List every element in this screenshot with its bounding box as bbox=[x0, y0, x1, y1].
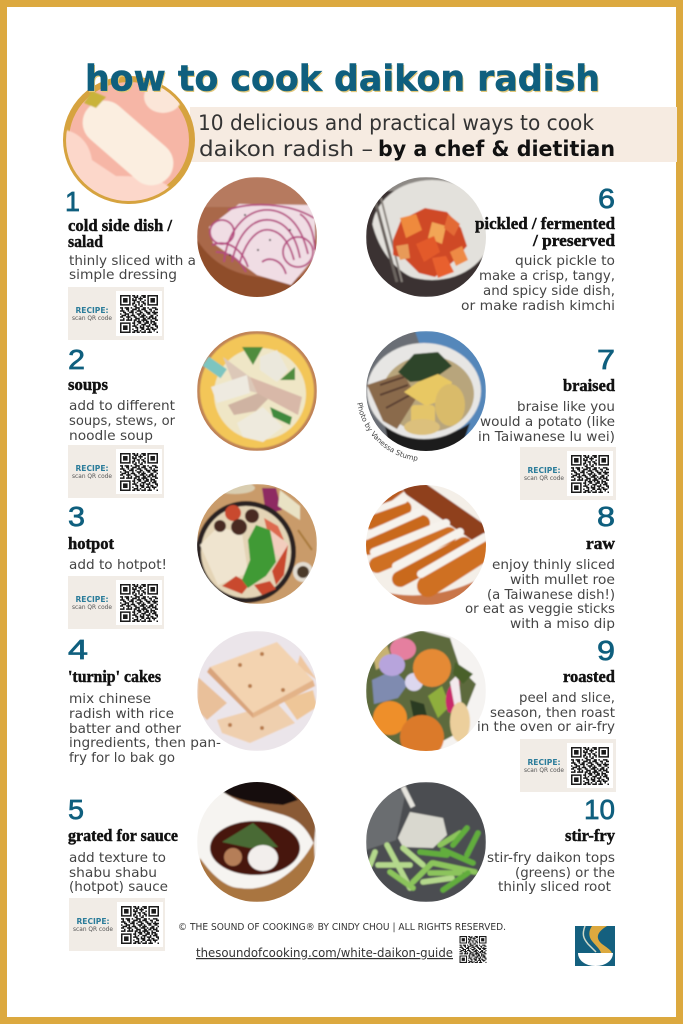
item 10: stir-fry: stir-fry bbox=[565, 826, 616, 845]
subtitle bbox=[198, 111, 615, 161]
recipe QR box 5 bbox=[69, 898, 165, 951]
recipe QR box 2 bbox=[68, 445, 164, 498]
recipe QR box 9: scan QR code bbox=[524, 767, 564, 774]
item 3: hotpot: hotpot bbox=[68, 534, 115, 553]
item 2: soups: 2 bbox=[68, 344, 85, 375]
photo credit: Photo by Vanessa Stump bbox=[357, 402, 418, 462]
photo 10: stir-fry greens bbox=[366, 782, 486, 902]
item 6: pickled: or make radish kimchi bbox=[461, 298, 615, 314]
recipe QR box 1 bbox=[68, 287, 164, 340]
photo 3: hotpot bbox=[196, 482, 317, 604]
recipe QR box 7: scan QR code bbox=[524, 475, 564, 482]
item 9: roasted: season, then roast bbox=[490, 705, 615, 721]
title: how to cook daikon radish bbox=[85, 58, 600, 100]
item 2: soups: noodle soup bbox=[69, 428, 153, 444]
item 8: raw bbox=[465, 501, 615, 632]
recipe QR box 3: RECIPE: bbox=[76, 595, 108, 604]
item 7: braised: braised bbox=[563, 376, 615, 395]
item 5: grated for sauce bbox=[68, 794, 178, 895]
item 10: stir-fry: thinly sliced root bbox=[498, 879, 611, 895]
photo 2: soup bowl bbox=[197, 331, 317, 451]
item 10: stir-fry bbox=[487, 794, 616, 895]
item 8: raw: (a Taiwanese dish!) bbox=[487, 587, 615, 603]
item 1: cold side dish bbox=[65, 186, 196, 283]
hero photo: daikon on pink background bbox=[60, 79, 192, 204]
item 6: pickled: pickled / fermented bbox=[475, 214, 615, 233]
item 4: turnip cakes: mix chinese bbox=[69, 691, 151, 707]
item 9: roasted: peel and slice, bbox=[519, 690, 615, 706]
item 4: turnip cakes: 'turnip' cakes bbox=[68, 667, 162, 686]
item 9: roasted: roasted bbox=[563, 667, 615, 686]
item 9: roasted: in the oven or air-fry bbox=[477, 719, 615, 735]
item 1: cold side dish: cold side dish / bbox=[68, 216, 172, 235]
logo bbox=[575, 926, 615, 966]
item 3: hotpot: add to hotpot! bbox=[69, 557, 167, 573]
item 8: raw: with mullet roe bbox=[510, 572, 615, 588]
item 5: grated for sauce: add texture to bbox=[69, 850, 166, 866]
item 8: raw: enjoy thinly sliced bbox=[492, 557, 615, 573]
item 7: braised: in Taiwanese lu wei) bbox=[478, 429, 615, 445]
item 4: turnip cakes: batter and other bbox=[69, 721, 181, 737]
item 7: braised: 7 bbox=[597, 344, 615, 375]
photo 5: grated radish sauce bbox=[197, 780, 317, 902]
title: how to cook daikon radish bbox=[86, 60, 601, 101]
item 7: braised bbox=[478, 344, 615, 445]
item 3: hotpot: 3 bbox=[68, 501, 85, 532]
recipe QR box 5: scan QR code bbox=[73, 926, 113, 933]
item 10: stir-fry: stir-fry daikon tops bbox=[487, 850, 615, 866]
item 7: braised: braise like you bbox=[517, 399, 615, 415]
item 6: pickled: make a crisp, tangy, bbox=[479, 268, 615, 284]
item 2: soups: soups bbox=[68, 375, 109, 394]
recipe QR box 1: scan QR code bbox=[72, 315, 112, 322]
item 2: soups: soups, stews, or bbox=[69, 413, 175, 429]
item 4: turnip cakes: ingredients, then pan- bbox=[69, 735, 221, 751]
recipe QR box 9: RECIPE: bbox=[528, 758, 560, 767]
item 5: grated for sauce: (hotpot) sauce bbox=[69, 879, 168, 895]
item 5: grated for sauce: 5 bbox=[68, 794, 84, 825]
item 4: turnip cakes: radish with rice bbox=[69, 706, 174, 722]
recipe QR box 2: scan QR code bbox=[72, 473, 112, 480]
item 4: turnip cakes: fry for lo bak go bbox=[69, 750, 175, 766]
subtitle: by a chef & dietitian bbox=[378, 137, 615, 161]
recipe QR box 7 bbox=[520, 447, 616, 500]
item 1: cold side dish: 1 bbox=[65, 186, 80, 217]
subtitle band bbox=[190, 107, 677, 162]
website link: thesoundofcooking.com/white-daikon-guide bbox=[196, 946, 453, 960]
item 6: pickled: and spicy side dish, bbox=[483, 283, 615, 299]
item 9: roasted: 9 bbox=[597, 635, 615, 666]
item 9: roasted bbox=[477, 635, 615, 735]
item 1: cold side dish: simple dressing bbox=[69, 267, 177, 283]
recipe QR box 5: RECIPE: bbox=[76, 917, 110, 926]
item 4: turnip cakes bbox=[68, 634, 221, 766]
recipe QR box 3 bbox=[68, 576, 164, 629]
item 8: raw: or eat as veggie sticks bbox=[465, 601, 615, 617]
photo 9: roasted vegetables bbox=[366, 630, 486, 759]
copyright line: © THE SOUND OF COOKING® BY CINDY CHOU | ALL RIGHTS RESERVED. bbox=[178, 922, 506, 933]
item 7: braised: would a potato (like bbox=[480, 414, 615, 430]
recipe QR box 2: RECIPE: bbox=[76, 464, 108, 473]
item 8: raw: 8 bbox=[597, 501, 615, 532]
item 5: grated for sauce: shabu shabu bbox=[69, 865, 157, 881]
photo 7: braised radish bbox=[366, 331, 486, 453]
recipe QR box 1: RECIPE: bbox=[76, 306, 108, 315]
item 1: cold side dish: salad bbox=[68, 232, 103, 251]
item 1: cold side dish: thinly sliced with a bbox=[69, 253, 196, 269]
item 2: soups bbox=[68, 344, 175, 444]
recipe QR box 7: RECIPE: bbox=[528, 466, 560, 475]
item 4: turnip cakes: 4 bbox=[68, 634, 88, 665]
photo 6: radish kimchi bbox=[366, 177, 492, 297]
item 6: pickled: / preserved bbox=[532, 231, 615, 250]
item 6: pickled bbox=[461, 183, 615, 314]
item 3: hotpot bbox=[68, 501, 167, 573]
subtitle: 10 delicious and practical ways to cook bbox=[198, 111, 595, 135]
item 5: grated for sauce: grated for sauce bbox=[68, 826, 178, 845]
footer QR code bbox=[460, 936, 486, 963]
recipe QR box 9 bbox=[520, 739, 616, 792]
photo 1: cold radish salad bbox=[197, 177, 317, 300]
recipe QR box 3: scan QR code bbox=[72, 604, 112, 611]
item 6: pickled: quick pickle to bbox=[515, 253, 615, 269]
photo 4: turnip cakes bbox=[197, 631, 317, 751]
item 2: soups: add to different bbox=[69, 398, 175, 414]
item 10: stir-fry: 10 bbox=[584, 794, 615, 825]
photo 8: raw radish with mullet roe bbox=[366, 485, 486, 605]
item 8: raw: raw bbox=[586, 534, 615, 553]
item 8: raw: with a miso dip bbox=[510, 616, 615, 632]
item 10: stir-fry: (greens) or the bbox=[515, 865, 615, 881]
item 6: pickled: 6 bbox=[598, 183, 615, 214]
subtitle: daikon radish – bbox=[199, 137, 373, 161]
